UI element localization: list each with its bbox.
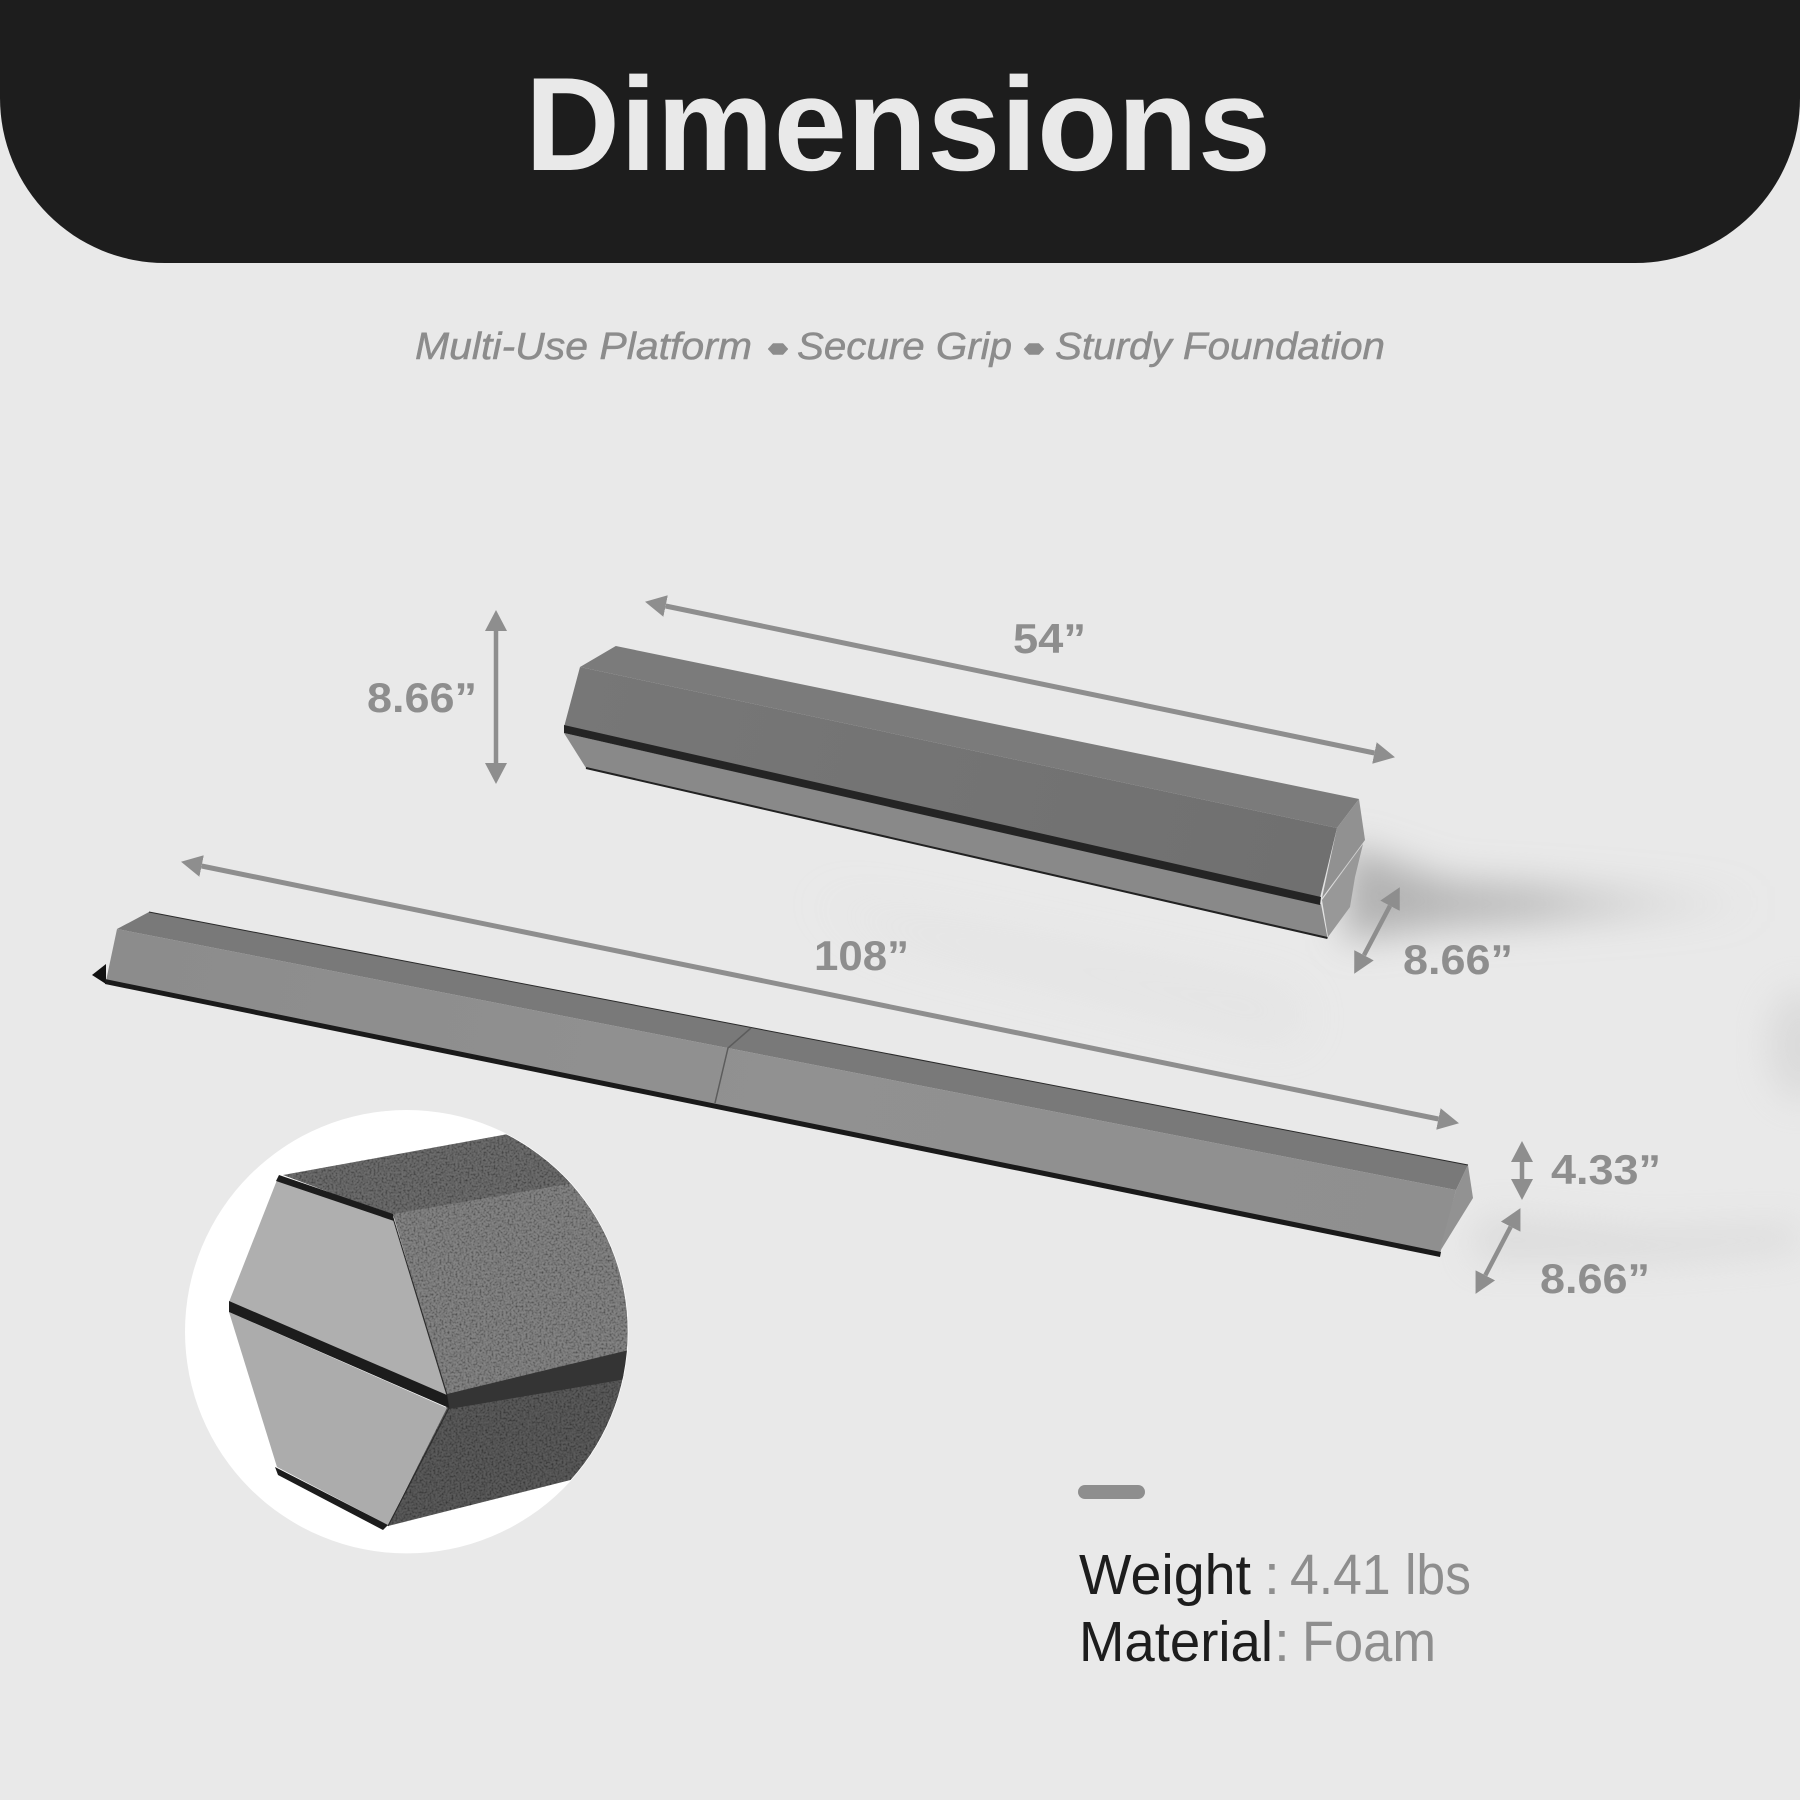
label: 8.66 inch height: 8.66”	[367, 674, 477, 721]
hexagon beam close-up	[229, 1134, 628, 1530]
black strip: top	[276, 1175, 394, 1221]
specifications block	[1078, 1485, 1471, 1674]
label: 8.66 inch width, long beam: 8.66”	[1540, 1255, 1650, 1302]
label: 108 inch: 108”	[814, 932, 909, 979]
separator dot	[1024, 344, 1044, 354]
arrow: 108 inch length	[202, 866, 1438, 1119]
subtitle: Secure Grip	[797, 326, 1012, 368]
side face	[106, 929, 1456, 1254]
subtitle	[415, 326, 1385, 368]
arrow: 8.66 inch height	[494, 631, 498, 763]
black base tip	[92, 964, 106, 984]
subtitle: Multi-Use Platform	[415, 326, 752, 368]
top edge line	[149, 912, 1468, 1165]
upper end cap	[1322, 799, 1365, 898]
lower side face	[564, 733, 1328, 938]
soft floor shadows	[800, 845, 1800, 1262]
weight value: 4.41 lbs	[1290, 1543, 1471, 1607]
weight line: Weight	[1079, 1543, 1251, 1607]
top bevel	[580, 646, 1359, 828]
end cap	[1439, 1165, 1473, 1253]
arrow: 54 inch length	[666, 606, 1374, 753]
fold line	[715, 1028, 751, 1103]
arrow: 8.66 inch width, short beam	[1364, 906, 1390, 955]
upper side face	[564, 667, 1337, 898]
arrow: 4.33 inch height	[1520, 1162, 1524, 1179]
separator dot	[768, 344, 788, 354]
bottom edge line	[586, 768, 1328, 938]
black seam	[564, 725, 1321, 905]
side seam	[447, 1350, 627, 1409]
white disc	[185, 1110, 628, 1553]
upper cut face	[229, 1180, 447, 1395]
textured top face	[283, 1134, 574, 1216]
cut face outline	[388, 1218, 449, 1526]
material colon: :	[1274, 1610, 1290, 1674]
material line: Material	[1079, 1610, 1273, 1674]
label: 54 inch: 54”	[1013, 615, 1086, 662]
textured upper side face	[393, 1184, 628, 1394]
arrow: 8.66 inch width, long beam	[1485, 1227, 1511, 1275]
lower end cap	[1322, 844, 1363, 937]
textured lower side face	[388, 1375, 624, 1526]
title: Dimensions	[525, 51, 1271, 199]
subtitle: Sturdy Foundation	[1055, 326, 1385, 368]
accent pill	[1078, 1485, 1145, 1499]
base strip	[105, 979, 1441, 1257]
detail circle callout	[185, 1110, 650, 1553]
short balance beam (54 inch)	[564, 646, 1365, 938]
label: 4.33 inch: 4.33”	[1551, 1146, 1661, 1193]
header band	[0, 0, 1800, 263]
material value: Foam	[1302, 1610, 1436, 1674]
long balance beam (108 inch)	[92, 912, 1473, 1257]
top bevel	[117, 912, 1468, 1190]
weight colon: :	[1264, 1543, 1280, 1607]
black strip: centre	[229, 1301, 449, 1408]
lower cut face	[229, 1312, 447, 1525]
label: 8.66 inch width, short beam: 8.66”	[1403, 936, 1513, 983]
black strip: bottom	[275, 1467, 388, 1530]
